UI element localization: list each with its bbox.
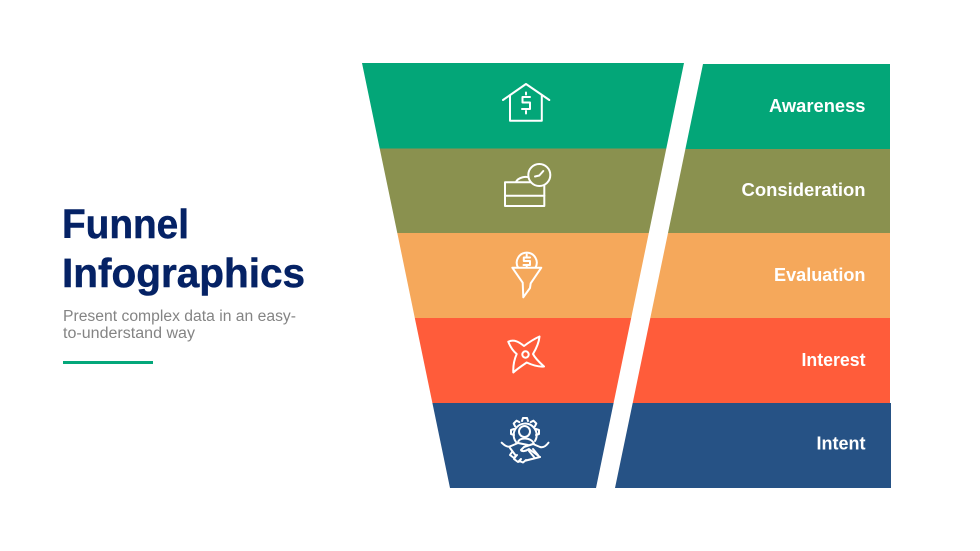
- accent underline: [63, 361, 153, 364]
- band: consideration left: [380, 148, 666, 233]
- label: Intent: Intent: [816, 432, 866, 454]
- label: Evaluation: Evaluation: [774, 264, 866, 285]
- label: Interest: Interest: [802, 349, 866, 370]
- icon: house with dollar sign: [503, 84, 549, 121]
- icon: cake with clock: [505, 164, 550, 206]
- band: interest left: [415, 318, 631, 403]
- band: intent right: [615, 403, 891, 488]
- band: intent left: [432, 403, 614, 488]
- label: Awareness: Awareness: [769, 95, 866, 116]
- band: awareness right: [685, 64, 890, 149]
- band: evaluation left: [397, 233, 649, 318]
- icon: shuriken star: [508, 336, 544, 372]
- band: interest right: [633, 318, 890, 403]
- panel: right funnel half: [615, 64, 891, 488]
- subtitle text: Present complex data in an easy-: [63, 308, 296, 325]
- panel: title block: [62, 201, 305, 364]
- subtitle text: to-understand way: [63, 325, 195, 342]
- title: [62, 201, 305, 296]
- label: Consideration: Consideration: [742, 179, 866, 200]
- icon: funnel with coin: [512, 253, 541, 297]
- title: Infographics: [62, 250, 305, 296]
- panel: left funnel half: [362, 63, 684, 488]
- subtitle text: [63, 308, 296, 342]
- band: consideration right: [668, 149, 890, 233]
- title: Funnel: [62, 201, 189, 247]
- band: awareness left: [362, 63, 684, 148]
- icon: handshake with gear: [502, 418, 548, 462]
- band: evaluation right: [650, 233, 890, 318]
